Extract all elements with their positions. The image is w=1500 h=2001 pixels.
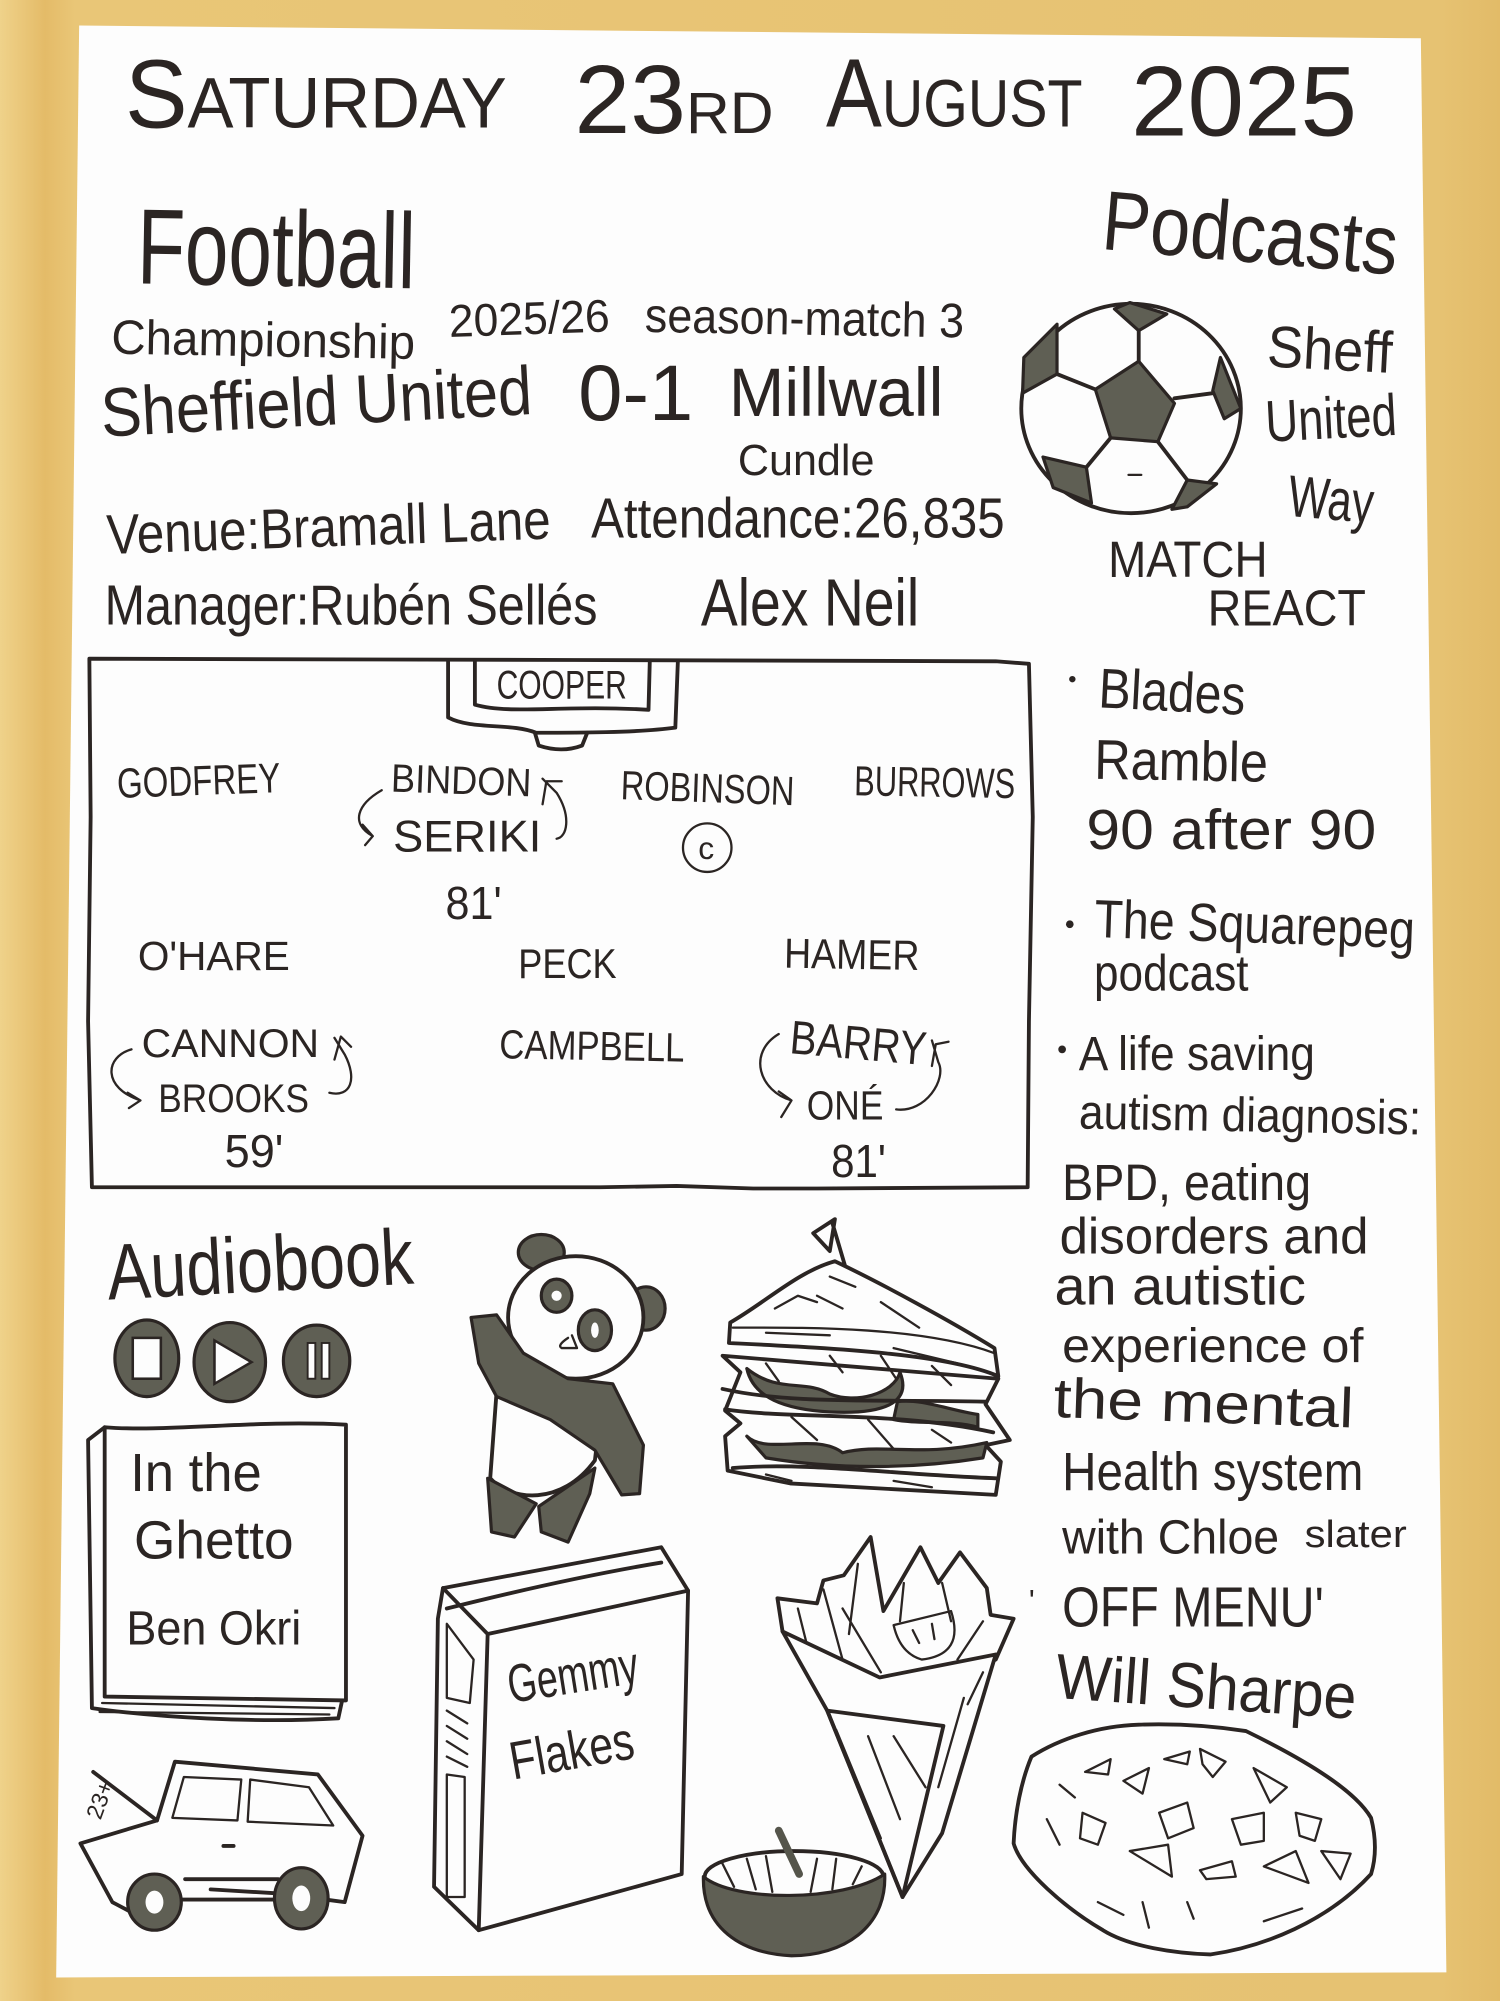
audiobook cover: in the ghetto (88, 1423, 346, 1720)
football section (99, 186, 1005, 641)
icon: tortilla chips cone (777, 1537, 1014, 1897)
podcast: sheff united way (1264, 314, 1398, 536)
icon: cookie (1014, 1724, 1375, 1954)
podcast: sheff united way: United (1264, 383, 1398, 455)
substitution arrows: cannon brooks (111, 1037, 351, 1108)
substitution minutes: 59' (225, 1125, 283, 1177)
score line: 0-1 (578, 348, 693, 437)
substitution minutes (225, 1125, 886, 1187)
icon: club sandwich (723, 1219, 1010, 1495)
competition line: Championship (111, 311, 416, 370)
forwards: CAMPBELL (499, 1021, 685, 1071)
competition line: 2025/26 (448, 289, 610, 347)
podcast: sheff united way: Sheff (1266, 314, 1395, 386)
panda ears (518, 1234, 564, 1270)
icon: football (1021, 303, 1241, 513)
book: gemmy flakes: Gemmy (503, 1635, 643, 1715)
panda head (508, 1256, 643, 1379)
icon: stop (115, 1320, 179, 1397)
substitution arrows: barry one (760, 1034, 949, 1117)
captain badge: c (698, 830, 714, 866)
penalty box (448, 661, 678, 733)
podcast: off menu will sharpe (1029, 1575, 1359, 1733)
chips (777, 1537, 1014, 1698)
score line: Sheffield United (99, 352, 534, 452)
icon: pause (283, 1325, 350, 1397)
sandwich pick flag (813, 1219, 853, 1292)
podcast: a life saving autism diagnosis: A life saving (1079, 1027, 1315, 1081)
podcast: off menu will sharpe: ' (1029, 1584, 1035, 1618)
heading: audiobook: Audiobook (105, 1212, 416, 1317)
pitch outline (88, 659, 1033, 1189)
audiobook cover: in the ghetto: Ghetto (134, 1511, 294, 1571)
podcast: a life saving autism diagnosis: Health system (1062, 1442, 1363, 1502)
podcast: the squarepeg podcast: The Squarepeg (1094, 889, 1416, 960)
podcast: the squarepeg podcast: podcast (1094, 945, 1249, 1002)
podcast: sheff united way: Way (1286, 464, 1377, 536)
defenders: BURROWS (854, 757, 1016, 807)
forwards: BARRY (788, 1011, 929, 1076)
panda scarf and arm (471, 1315, 643, 1495)
book: gemmy flakes: Flakes (505, 1711, 638, 1791)
podcast: a life saving autism diagnosis (1053, 1027, 1422, 1565)
heading: podcasts: Podcasts (1099, 173, 1402, 293)
captain badge (683, 823, 731, 872)
midfielders: PECK (518, 940, 617, 987)
substitution minutes: 81' (831, 1135, 886, 1187)
forwards: BROOKS (158, 1077, 309, 1121)
icon: play (194, 1323, 266, 1402)
scorer: Cundle (738, 437, 874, 485)
podcast: off menu will sharpe: Will Sharpe (1053, 1640, 1359, 1733)
defenders (116, 754, 1016, 861)
paper cone (783, 1631, 996, 1897)
managers: Manager:Rubén Sellés (105, 573, 597, 636)
title (125, 38, 1357, 157)
podcast: a life saving autism diagnosis: disorders and (1060, 1208, 1369, 1265)
title: 23RD (574, 45, 774, 154)
competition line: season-match 3 (644, 289, 965, 348)
icon: panda (471, 1234, 665, 1542)
podcast: 90 after 90: 90 after 90 (1086, 798, 1376, 861)
managers: Alex Neil (701, 567, 919, 641)
podcast: blades ramble: Blades (1097, 656, 1247, 727)
podcast: a life saving autism diagnosis: slater (1305, 1513, 1407, 1556)
podcast: a life saving autism diagnosis: BPD, eating (1062, 1154, 1311, 1211)
title: AUGUST (826, 38, 1083, 147)
podcast: match react: MATCH (1108, 531, 1268, 588)
car wheels (128, 1874, 181, 1930)
icon: bowl of dip (703, 1831, 885, 1956)
penalty arc (535, 733, 587, 749)
defenders: SERIKI (393, 812, 541, 861)
midfielders: O'HARE (138, 933, 290, 979)
podcast: a life saving autism diagnosis: an autistic (1054, 1257, 1306, 1317)
podcast: a life saving autism diagnosis: the mental (1053, 1366, 1355, 1439)
midfielders (138, 930, 920, 987)
icon: audio controls (115, 1320, 350, 1402)
podcast: a life saving autism diagnosis: autism diagnosis: (1079, 1086, 1422, 1145)
midfielders: HAMER (784, 930, 920, 979)
lime wedge (894, 1611, 954, 1660)
forwards: CANNON (142, 1022, 319, 1066)
forwards (142, 1011, 929, 1129)
managers (105, 567, 919, 641)
forwards: ONÉ (807, 1083, 883, 1129)
substitution minute: 81' (446, 877, 502, 929)
panel: team line-up pitch (88, 659, 1033, 1189)
car engine note: 23+ (81, 1777, 119, 1822)
open bonnet (93, 1772, 157, 1820)
title: 2025 (1131, 46, 1357, 157)
car trim (185, 1846, 278, 1893)
panda legs (488, 1478, 536, 1537)
podcast: the squarepeg podcast (1066, 889, 1416, 1002)
substitution arrows: bindon seriki (359, 779, 566, 845)
venue: Venue:Bramall Lane (105, 488, 552, 566)
goal area (475, 661, 650, 710)
goalkeeper: COOPER (497, 663, 627, 707)
podcast: a life saving autism diagnosis: with Chloe (1061, 1511, 1279, 1565)
audiobook cover: in the ghetto: In the (130, 1443, 262, 1503)
spine windows (447, 1624, 474, 1897)
defenders: BINDON (390, 757, 532, 805)
top slice of bread (729, 1261, 998, 1376)
score line (99, 348, 943, 452)
score line: Millwall (729, 354, 943, 431)
podcast: blades ramble (1069, 656, 1269, 794)
panda body (490, 1391, 600, 1495)
audiobook cover: in the ghetto: Ben Okri (126, 1601, 301, 1655)
podcast: match react (1108, 531, 1366, 637)
title: SATURDAY (125, 40, 507, 149)
heading: football: Football (136, 186, 417, 311)
competition line (111, 289, 965, 370)
panda face (541, 1279, 611, 1351)
podcast list (1029, 656, 1422, 1733)
podcast: match react: REACT (1208, 580, 1366, 637)
defenders: GODFREY (116, 754, 281, 807)
podcast: off menu will sharpe: OFF MENU' (1062, 1575, 1324, 1638)
icon: car with open bonnet (80, 1762, 363, 1930)
defenders: ROBINSON (620, 762, 795, 814)
car windows (172, 1777, 333, 1826)
podcast: a life saving autism diagnosis: experience of (1062, 1319, 1364, 1373)
podcast: blades ramble: Ramble (1094, 728, 1269, 794)
book: gemmy flakes (434, 1547, 688, 1930)
sandwich filling layers (723, 1356, 1010, 1495)
attendance: Attendance:26,835 (591, 486, 1005, 549)
